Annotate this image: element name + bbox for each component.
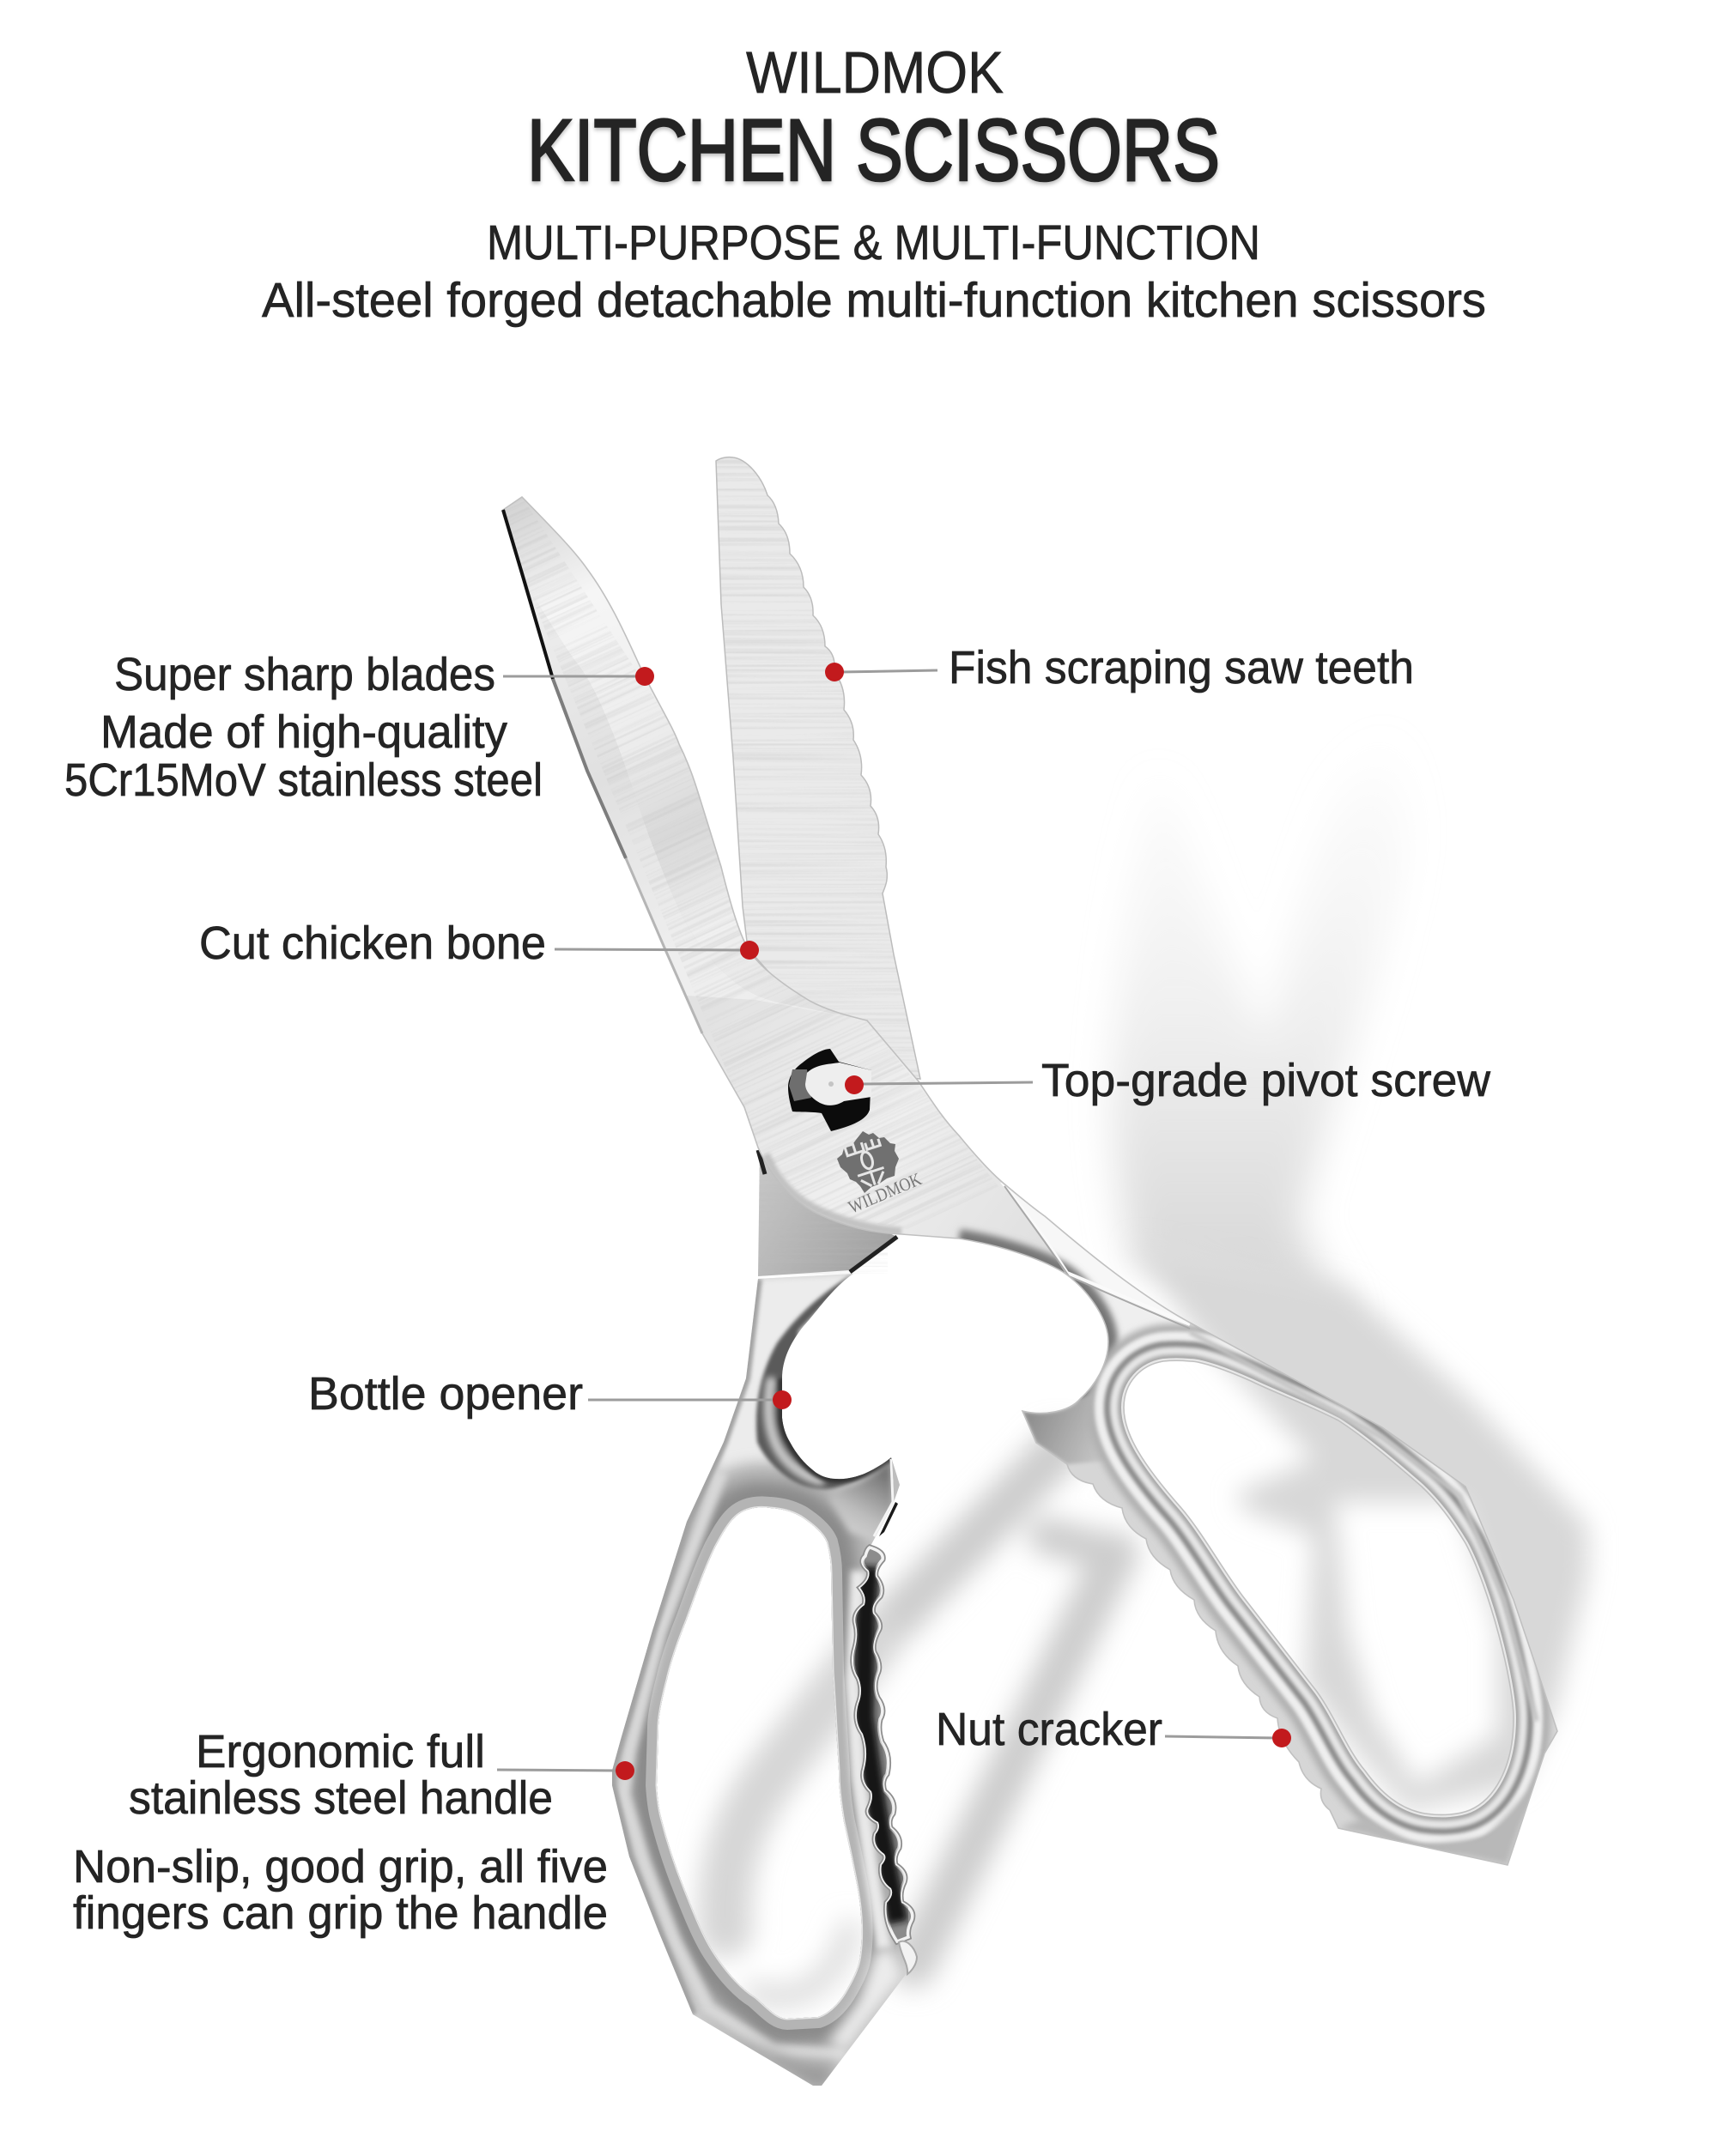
right serrated blade: [704, 451, 927, 1086]
callout: super sharp blades: [64, 649, 654, 806]
tagline: All-steel forged detachable multi-function kitchen scissors: [262, 273, 1486, 328]
callout: fish scraping saw teeth: Fish scraping saw teeth: [949, 642, 1414, 693]
outer rim left: [612, 1279, 758, 2014]
blade outer facet: [503, 497, 867, 1020]
callout: bottle opener: [308, 1368, 792, 1420]
left blade and right handle piece: [155, 270, 1557, 1865]
grip dark sliver: [879, 1502, 898, 1536]
pivot plate: [687, 996, 1067, 1273]
grip end bulb: [899, 1941, 917, 1974]
hand grip channel: [853, 1502, 917, 1974]
shadow: blades: [1112, 729, 1406, 1322]
blade black edge: [503, 510, 553, 679]
callout: ergonomic handle: [73, 1726, 634, 1939]
light strip beside grip: [852, 1571, 884, 1948]
callout: pivot screw: [845, 1055, 1491, 1106]
scissors: [501, 457, 1558, 2086]
neck flat below facet: [1067, 1273, 1190, 1390]
bottle opener dark crescent: [756, 1274, 869, 1489]
upper outer facet of handle: [1190, 1332, 1537, 1721]
shadow: right handle: [1132, 1245, 1588, 1811]
callout: cut chicken bone: [199, 918, 759, 969]
callout: ergonomic handle: Ergonomic full: [196, 1726, 485, 1777]
callout: ergonomic handle: stainless steel handle: [129, 1772, 553, 1824]
blade inner bevel: [530, 591, 867, 1116]
handle neck highlight: [1002, 1182, 1245, 1365]
logo: WILDMOK emblem: WILDMOK: [846, 1168, 925, 1218]
callout: nut cracker: Nut cracker: [936, 1704, 1162, 1755]
lower right light facet: [828, 1948, 904, 2051]
logo: WILDMOK emblem: [837, 1131, 925, 1218]
callout: bottle opener: Bottle opener: [308, 1368, 583, 1420]
bottom tip shading: [731, 2033, 838, 2086]
main heading: KITCHEN SCISSORS: [527, 101, 1220, 199]
callout: cut chicken bone: Cut chicken bone: [199, 918, 546, 969]
crescent highlight: [768, 1382, 820, 1481]
callout: pivot screw: Top-grade pivot screw: [1041, 1055, 1491, 1106]
cast shadows: [725, 729, 1588, 1996]
facet line: [1002, 1182, 1190, 1324]
callout: super sharp blades: Made of high-quality: [100, 706, 507, 758]
callout: ergonomic handle: Non-slip, good grip, all five: [73, 1841, 608, 1893]
bottom point facet: [1338, 1753, 1544, 1865]
shadow: left handle: [725, 1450, 1116, 1996]
callout: super sharp blades: Super sharp blades: [114, 649, 495, 700]
crescent inner edge: [782, 1378, 891, 1479]
ring bands around finger hole: [657, 1507, 862, 2019]
lower sheen of pivot plate: [766, 1154, 901, 1232]
piece outline: [503, 497, 1557, 1865]
brushed wedge under pivot: [758, 1150, 897, 1276]
brushed texture: [155, 270, 1296, 1410]
title block: [262, 39, 1486, 328]
callout: super sharp blades: 5Cr15MoV stainless steel: [64, 754, 543, 806]
subheading: MULTI-PURPOSE & MULTI-FUNCTION: [487, 215, 1260, 270]
opener curve bevel: [959, 1238, 1108, 1399]
opener hook body: [828, 1459, 894, 1541]
brand name: WILDMOK: [746, 39, 1004, 106]
callout: nut cracker: [936, 1704, 1291, 1755]
left handle: [612, 1274, 917, 2090]
middle streak on left band: [623, 1472, 846, 2056]
top flat of handle: [719, 1274, 850, 1473]
pivot screw: [788, 1049, 871, 1131]
callout: ergonomic handle: fingers can grip the handle: [73, 1887, 608, 1939]
right handle ring bands: [1124, 1360, 1514, 1814]
